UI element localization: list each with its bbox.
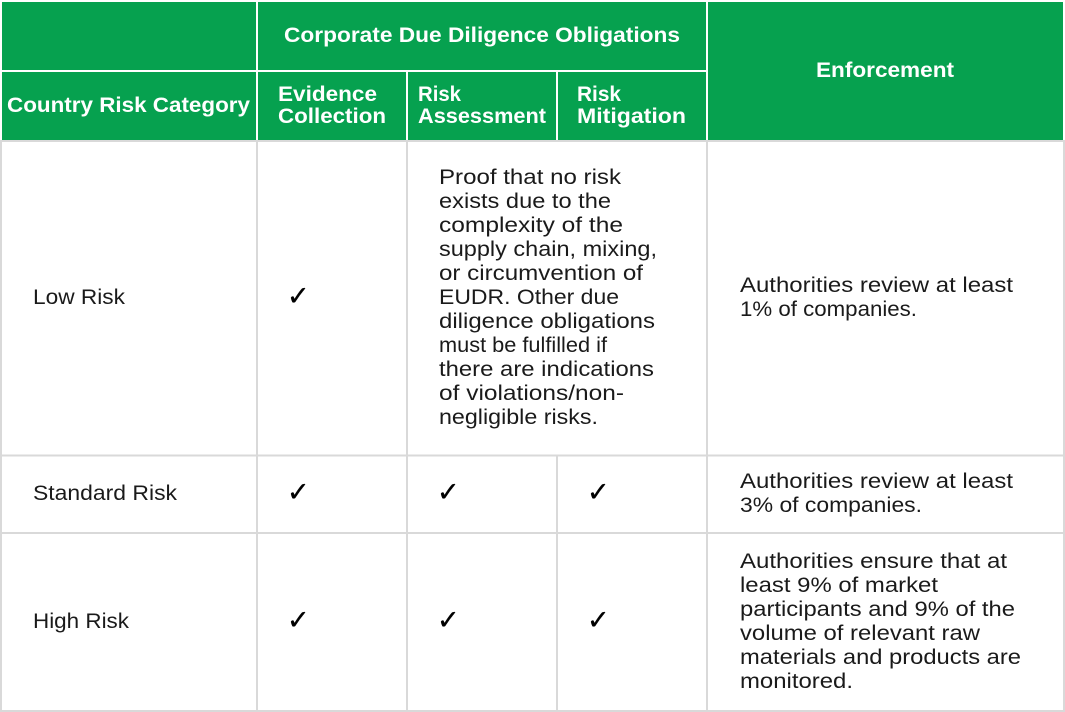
header cell: Evidence Collection xyxy=(258,72,406,140)
text: high risk enforcement: Authorities ensure that at xyxy=(740,550,1007,573)
text: low risk assessment and mitigation: negligible risks. xyxy=(439,406,598,429)
text: low risk assessment and mitigation: diligence obligations xyxy=(439,310,655,333)
check: risk mitigation, high risk: ✓ xyxy=(587,605,610,636)
text: standard risk enforcement: Authorities review at least xyxy=(740,470,1013,493)
text: low risk enforcement xyxy=(740,274,1013,321)
header row xyxy=(2,2,1063,140)
text: standard risk enforcement xyxy=(740,470,1013,517)
text: high risk enforcement: volume of relevant raw xyxy=(740,622,981,645)
text: low risk assessment and mitigation: must be fulfilled if xyxy=(439,334,607,357)
text: low risk assessment and mitigation: EUDR. Other due xyxy=(439,286,619,309)
header cell: Corporate Due Diligence Obligations xyxy=(258,2,706,70)
header cell: Evidence Collection: Evidence xyxy=(278,83,377,106)
row: Standard Risk xyxy=(33,470,1013,517)
header cell: Country Risk Category: Country Risk Category xyxy=(7,94,250,117)
text: high risk enforcement: materials and products are xyxy=(740,646,1021,669)
text: low risk assessment and mitigation: or circumvention of xyxy=(439,262,643,285)
text: low risk assessment and mitigation: complexity of the xyxy=(439,214,623,237)
text: low risk assessment and mitigation: there are indications xyxy=(439,358,654,381)
header cell: Risk Mitigation: Risk xyxy=(577,83,621,106)
text: high risk enforcement: monitored. xyxy=(740,670,853,693)
text: low risk assessment and mitigation: supply chain, mixing, xyxy=(439,238,657,261)
check: evidence collection, low risk: ✓ xyxy=(287,281,310,312)
text: high risk enforcement xyxy=(740,550,1021,693)
header cell: Risk Mitigation: Mitigation xyxy=(577,105,686,128)
row: Low Risk xyxy=(33,166,1013,429)
label: High Risk: High Risk xyxy=(33,610,130,633)
check: risk assessment, high risk: ✓ xyxy=(437,605,460,636)
text: low risk assessment and mitigation: of violations/non- xyxy=(439,382,624,405)
header cell: Risk Mitigation xyxy=(558,72,706,140)
text: low risk assessment and mitigation: exists due to the xyxy=(439,190,611,213)
label: Standard Risk: Standard Risk xyxy=(33,482,178,505)
header cell: Enforcement: Enforcement xyxy=(816,59,954,82)
text: high risk enforcement: least 9% of market xyxy=(740,574,938,597)
header cell: blank top left xyxy=(2,2,256,70)
check: risk assessment, standard risk: ✓ xyxy=(437,477,460,508)
text: low risk enforcement: 1% of companies. xyxy=(740,298,917,321)
header cell: Enforcement xyxy=(708,2,1063,140)
text: standard risk enforcement: 3% of companies. xyxy=(740,494,922,517)
header cell: Risk Assessment: Risk xyxy=(418,83,461,106)
text: low risk enforcement: Authorities review at least xyxy=(740,274,1013,297)
check: risk mitigation, standard risk: ✓ xyxy=(587,477,610,508)
text: low risk assessment and mitigation xyxy=(439,166,657,429)
check: evidence collection, standard risk: ✓ xyxy=(287,477,310,508)
header cell: Risk Assessment xyxy=(408,72,556,140)
row: High Risk xyxy=(33,550,1021,693)
header cell: Corporate Due Diligence Obligations: Corporate Due Diligence Obligations xyxy=(284,24,680,47)
label: Low Risk: Low Risk xyxy=(33,286,126,309)
header cell: Risk Assessment: Assessment xyxy=(418,105,546,128)
text: low risk assessment and mitigation: Proof that no risk xyxy=(439,166,622,189)
header cell: Country Risk Category xyxy=(2,72,256,140)
check: evidence collection, high risk: ✓ xyxy=(287,605,310,636)
text: high risk enforcement: participants and 9% of the xyxy=(740,598,1015,621)
header cell: Evidence Collection: Collection xyxy=(278,105,386,128)
